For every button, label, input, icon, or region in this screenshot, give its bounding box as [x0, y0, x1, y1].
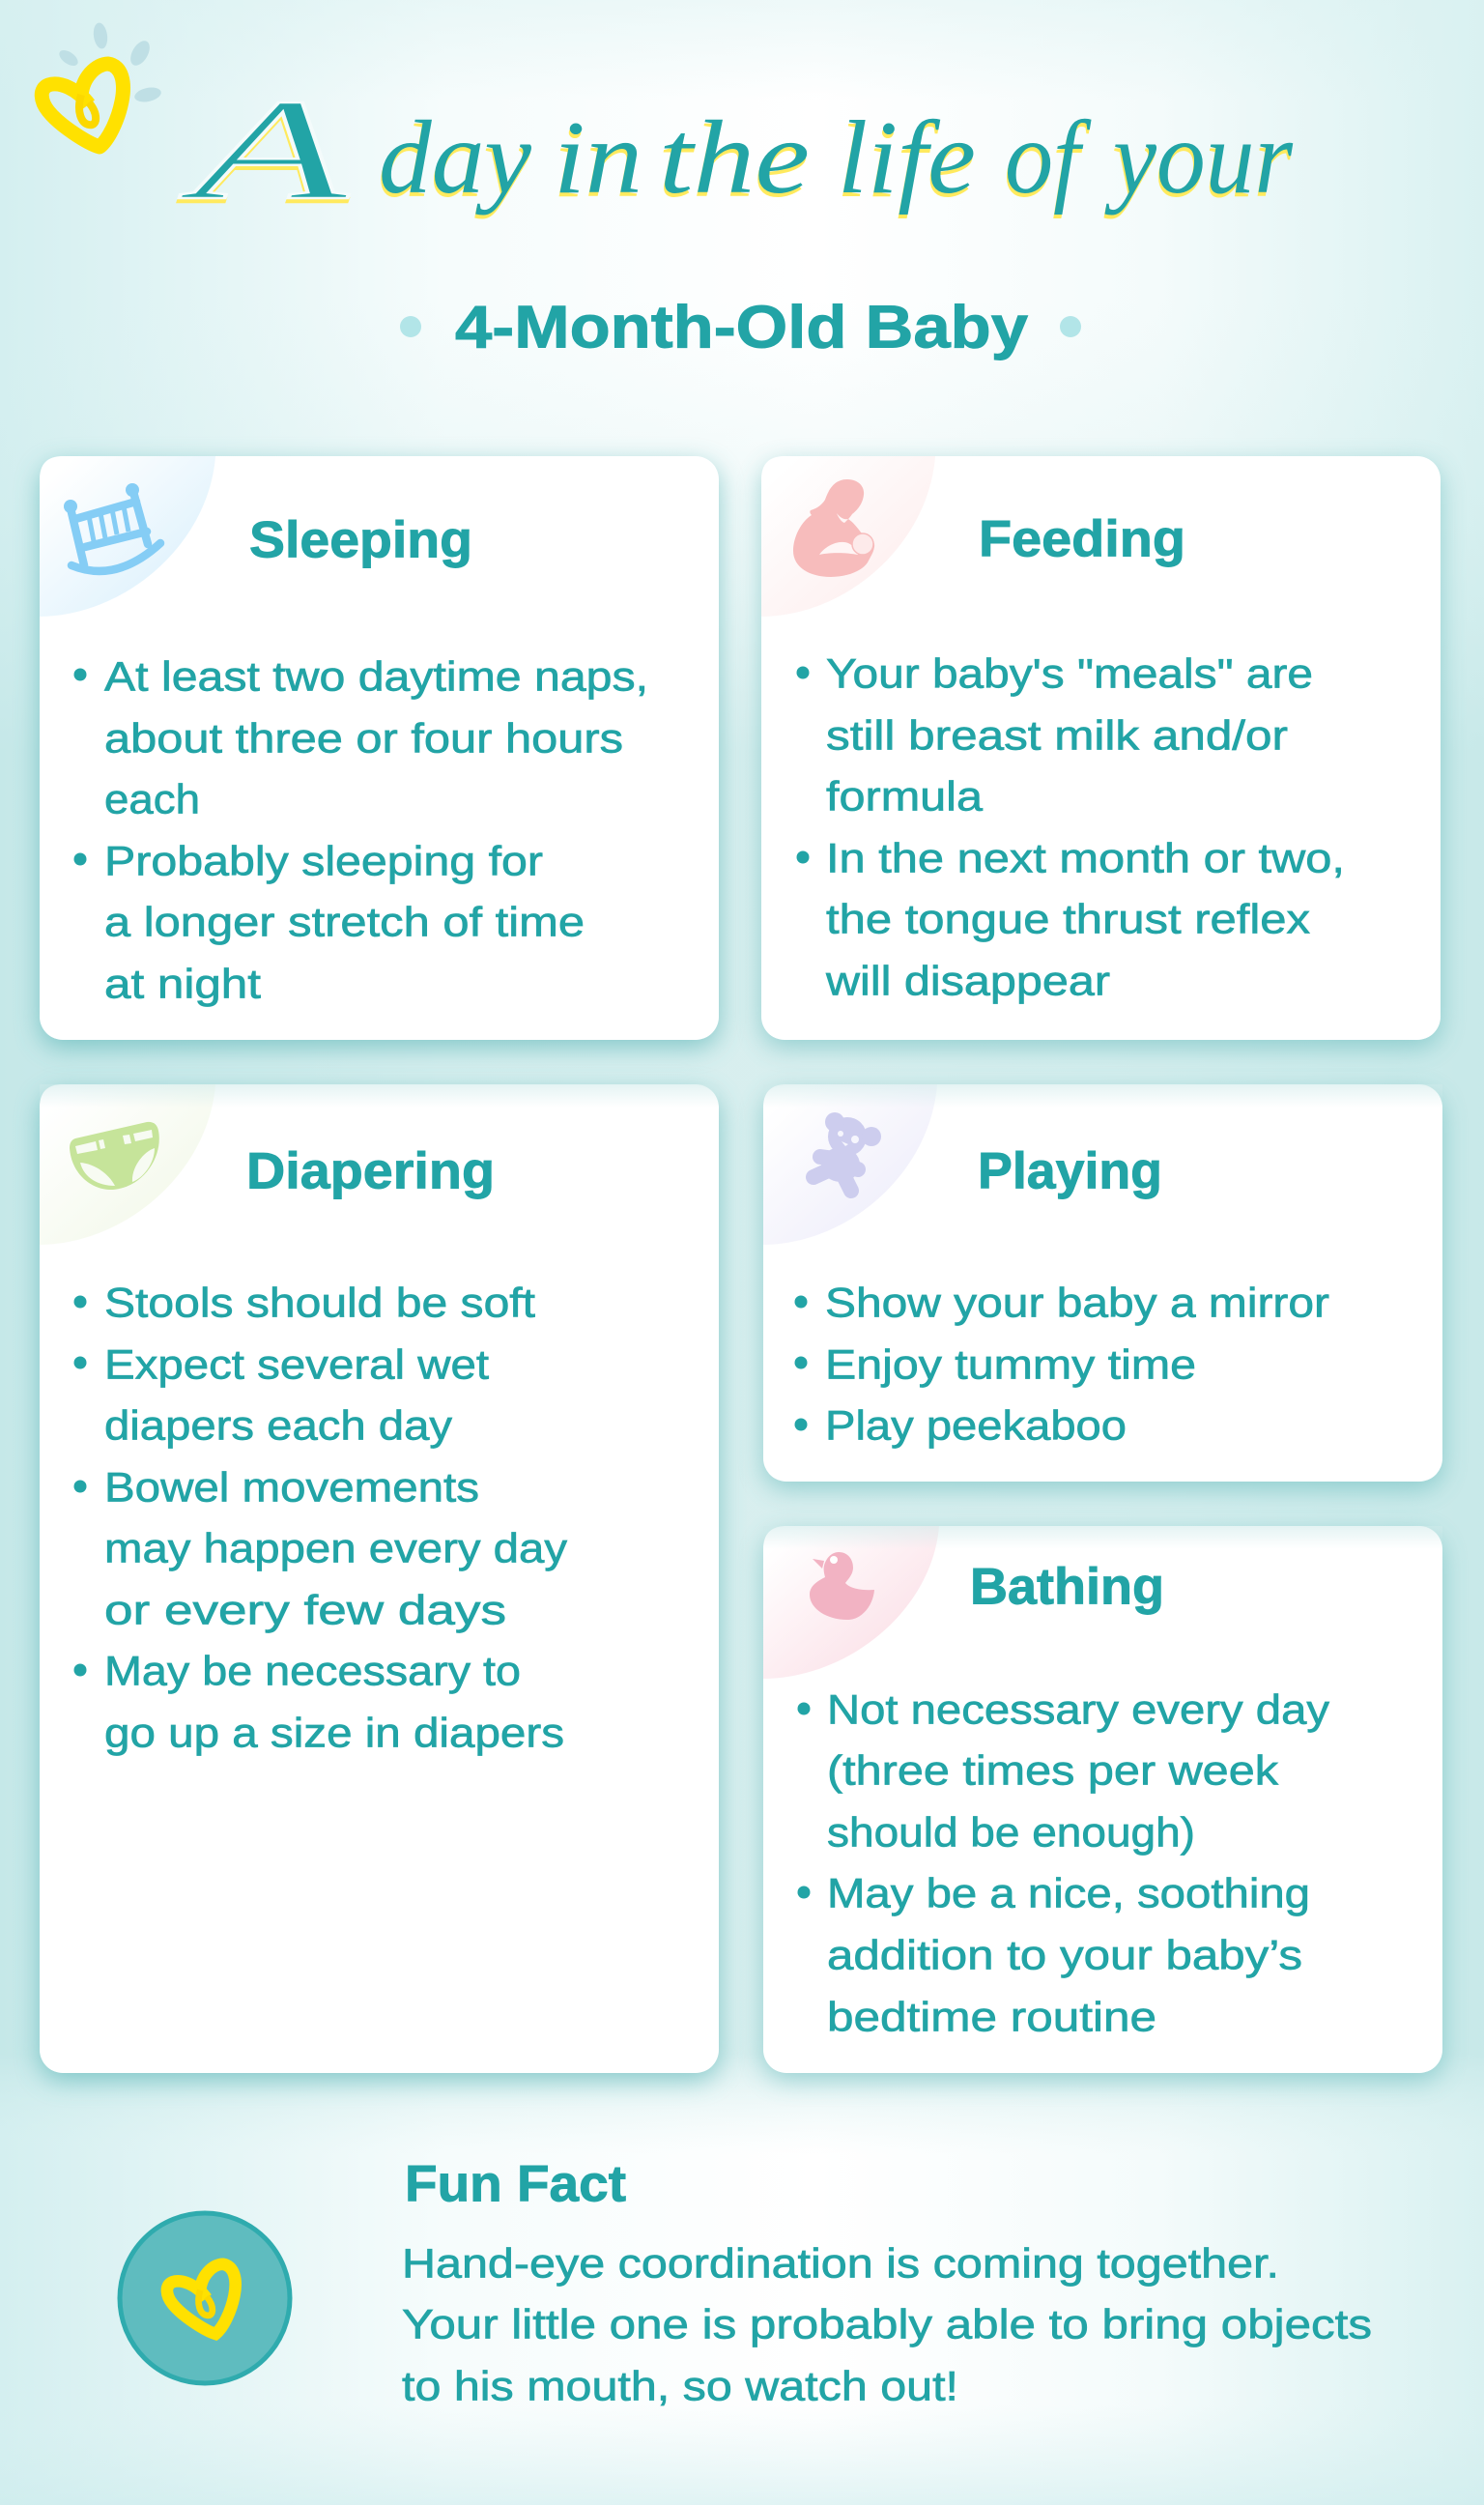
title: your [1104, 101, 1294, 216]
text: diapering bullets: go up a size in diapers [104, 1711, 564, 1757]
text: feeding bullets: In the next month or two, [826, 835, 1345, 881]
heading: Diapering: Diapering [246, 1142, 495, 1200]
text: feeding bullets: still breast milk and/or [826, 713, 1288, 760]
logo: yellow heart with rays [42, 22, 162, 147]
text: diapering bullets: or every few days [104, 1587, 506, 1633]
text: playing bullets: Show your baby a mirror [825, 1280, 1329, 1326]
text: sleeping bullets: Probably sleeping for [104, 839, 543, 885]
heading: Playing: Playing [978, 1142, 1162, 1200]
callout: fun fact: Fun Fact [405, 2155, 626, 2213]
text: diapering bullets: May be necessary to [104, 1649, 521, 1695]
text: bathing bullets: should be enough) [827, 1809, 1195, 1856]
text: bathing bullets: Not necessary every day [827, 1687, 1330, 1734]
callout: fun fact: Your little one is probably able to bring objects [402, 2302, 1372, 2348]
text: sleeping bullets: At least two daytime naps, [104, 653, 648, 700]
title: life [838, 101, 976, 216]
text: feeding bullets [796, 651, 1345, 1005]
title: in [554, 101, 642, 216]
text: feeding bullets: formula [826, 773, 983, 820]
title [178, 70, 1294, 230]
text: diapering bullets: may happen every day [104, 1525, 568, 1571]
text: sleeping bullets: about three or four hours [104, 715, 623, 762]
subtitle with dots: 4-Month-Old Baby [455, 294, 1029, 361]
text: sleeping bullets [73, 653, 648, 1007]
title: of [1005, 101, 1092, 216]
text: bathing bullets: bedtime routine [827, 1995, 1156, 2041]
text: playing bullets: Play peekaboo [825, 1403, 1127, 1450]
text: diapering bullets: diapers each day [104, 1403, 453, 1450]
panel: bathing [763, 1526, 1442, 2081]
heading: Bathing: Bathing [970, 1558, 1164, 1616]
panel: sleeping [40, 456, 719, 1048]
text: sleeping bullets: a longer stretch of time [104, 899, 585, 945]
panel: diapering [40, 1084, 719, 2081]
text: playing bullets: Enjoy tummy time [825, 1341, 1196, 1388]
callout: fun fact [402, 2155, 1372, 2410]
text: feeding bullets: will disappear [825, 959, 1110, 1005]
text: playing bullets [794, 1280, 1329, 1450]
panel: playing [763, 1084, 1442, 1489]
text: sleeping bullets: each [104, 777, 200, 823]
text: bathing bullets [798, 1687, 1330, 2041]
title: day [379, 101, 531, 216]
text: bathing bullets: addition to your baby’s [827, 1933, 1302, 1979]
icon: mother and baby [793, 479, 874, 577]
text: bathing bullets: (three times per week [827, 1747, 1279, 1794]
callout: fun fact: to his mouth, so watch out! [402, 2364, 958, 2410]
heading: Sleeping: Sleeping [249, 512, 472, 568]
text: diapering bullets: Bowel movements [104, 1465, 479, 1512]
heading: Feeding: Feeding [979, 510, 1185, 568]
icon: diaper [70, 1122, 159, 1190]
icon: fun fact heart badge [120, 2213, 290, 2383]
title: the [659, 101, 810, 216]
icon: cradle [64, 483, 160, 571]
panel: feeding [761, 456, 1441, 1048]
title: A [178, 70, 350, 230]
text: diapering bullets: Stools should be soft [104, 1280, 535, 1326]
text: sleeping bullets: at night [104, 961, 261, 1007]
text: bathing bullets: May be a nice, soothing [827, 1871, 1310, 1917]
text: feeding bullets: the tongue thrust reflex [826, 897, 1311, 943]
icon: rubber duck [810, 1552, 874, 1620]
icon: teddy bear [813, 1112, 881, 1191]
text: diapering bullets: Expect several wet [104, 1341, 489, 1388]
text: diapering bullets [73, 1280, 568, 1757]
text: feeding bullets: Your baby's "meals" are [826, 651, 1313, 698]
callout: fun fact: Hand-eye coordination is coming together. [402, 2240, 1279, 2287]
